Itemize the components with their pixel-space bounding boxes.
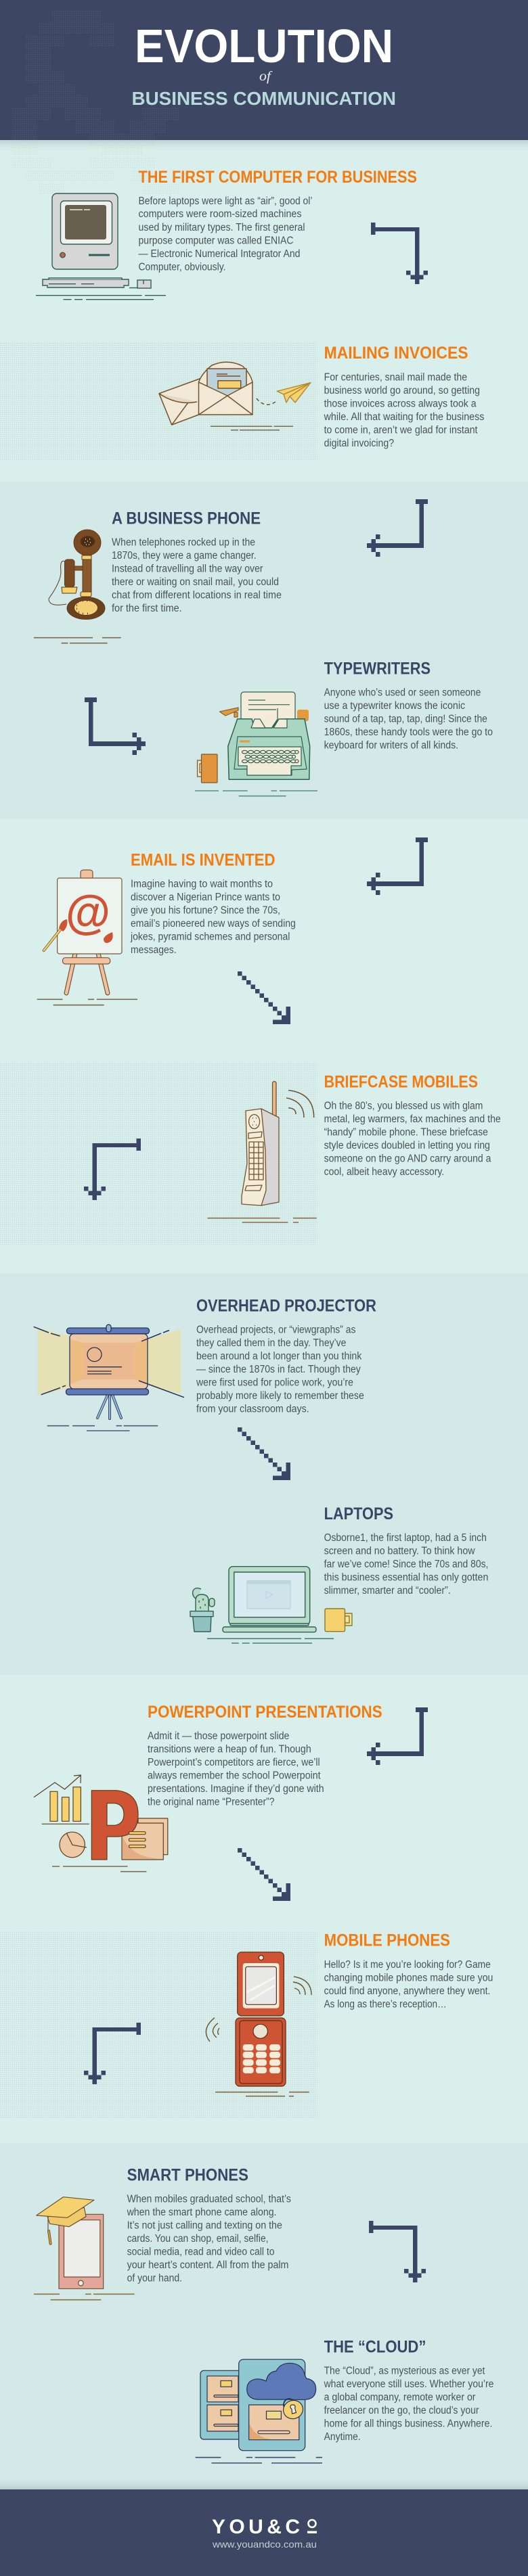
body text: Admit it — those powerpoint slide xyxy=(148,1730,289,1742)
body text: As long as there’s reception… xyxy=(324,1998,447,2010)
arrow xyxy=(84,2023,141,2084)
body text: Anytime. xyxy=(324,2431,361,2443)
body text: far we’ve come! Since the 70s and 80s, xyxy=(324,1559,488,1570)
body text: of your hand. xyxy=(127,2272,182,2284)
body text: were first used for police work, you’re xyxy=(196,1377,353,1388)
panel: powerpoint presentations xyxy=(34,1703,428,1901)
body text: discover a Nigerian Prince wants to xyxy=(131,892,280,903)
body text: Oh the 80’s, you blessed us with glam xyxy=(324,1100,483,1111)
body text: slimmer, smarter and “cooler”. xyxy=(324,1585,451,1596)
icon: presentation P with charts xyxy=(34,1775,168,1872)
body text xyxy=(130,878,296,956)
heading: LAPTOPS xyxy=(324,1504,393,1523)
icon: typewriter and mug xyxy=(195,692,317,796)
header banner xyxy=(0,0,528,194)
body text: It’s not just calling and texting on the xyxy=(127,2220,282,2231)
body text: 1870s, they were a game changer. xyxy=(112,550,257,561)
body text: — Electronic Numerical Integrator And xyxy=(138,248,301,260)
body text: freelancer on the go, the cloud’s your xyxy=(324,2405,479,2416)
panel: the cloud xyxy=(196,2338,493,2463)
body text: messages. xyxy=(131,944,177,956)
footer xyxy=(0,2476,528,2576)
body text: this business essential has only gotten xyxy=(324,1572,488,1583)
body text: been around a lot longer than you think xyxy=(196,1350,362,1362)
body text: use a typewriter knows the iconic xyxy=(324,700,465,712)
arrow xyxy=(367,1707,428,1765)
body text: Osborne1, the first laptop, had a 5 inch xyxy=(324,1532,487,1544)
title: EVOLUTION xyxy=(135,20,393,72)
heading: THE FIRST COMPUTER FOR BUSINESS xyxy=(138,168,417,187)
body text: social media, read and video call to xyxy=(127,2246,275,2257)
body text: Hello? Is it me you’re looking for? Game xyxy=(324,1959,491,1971)
arrow xyxy=(371,223,428,284)
body text: presentations. Imagine if they’d gone with xyxy=(148,1783,324,1795)
body text: screen and no battery. To think how xyxy=(324,1545,475,1557)
body text: sound of a tap, tap, tap, ding! Since the xyxy=(324,714,487,725)
body text: used by military types. The first general xyxy=(138,222,305,233)
body text: to come in, aren’t we glad for instant xyxy=(324,425,478,436)
heading: A BUSINESS PHONE xyxy=(112,509,261,528)
diagonal arrow xyxy=(238,1427,290,1480)
icon: brick phone xyxy=(207,1082,317,1222)
panel: typewriters xyxy=(85,660,493,796)
arrow xyxy=(369,2221,426,2282)
icon: projector screen xyxy=(34,1325,184,1431)
body text: there or waiting on snail mail, you could xyxy=(112,576,279,588)
arrow xyxy=(367,837,428,895)
body text: your heart’s content. All from the palm xyxy=(127,2259,288,2271)
panel: overhead projector xyxy=(34,1296,376,1480)
body text xyxy=(324,1959,493,2010)
body text: what everyone still uses. Whether you’re xyxy=(324,2378,493,2390)
arrow xyxy=(84,1138,141,1200)
heading: BRIEFCASE MOBILES xyxy=(324,1072,478,1091)
subtitle: BUSINESS COMMUNICATION xyxy=(131,88,396,109)
body text: from your classroom days. xyxy=(196,1403,309,1414)
body text xyxy=(324,1100,501,1178)
body text: Before laptops were light as “air”, good ol’ xyxy=(138,196,313,207)
body text: The “Cloud”, as mysterious as ever yet xyxy=(324,2366,485,2377)
body text: When mobiles graduated school, that’s xyxy=(127,2193,291,2205)
body text: metal, leg warmers, fax machines and the xyxy=(324,1113,501,1125)
heading: THE “CLOUD” xyxy=(324,2338,426,2357)
icon: envelopes and paper plane xyxy=(159,362,311,430)
body text: digital invoicing? xyxy=(324,438,394,449)
body text xyxy=(324,372,485,449)
heading: MOBILE PHONES xyxy=(324,1931,450,1950)
panel: email is invented xyxy=(37,837,428,1024)
body text: when the smart phone came along. xyxy=(127,2207,276,2218)
body text xyxy=(138,196,313,273)
icon: cloud with tablets xyxy=(196,2360,322,2463)
icon: easel with at sign: @ xyxy=(66,886,110,938)
body text: could find anyone, anywhere they went. xyxy=(324,1985,490,1997)
body text: purpose computer was called ENIAC xyxy=(138,235,294,246)
body text: 1860s, these handy tools were the go to xyxy=(324,727,493,738)
body text: they called them in the day. They’ve xyxy=(196,1337,346,1349)
logo: YOU&C xyxy=(212,2516,300,2538)
body text: business world go around, so getting xyxy=(324,385,480,396)
body text xyxy=(324,2366,493,2443)
heading: POWERPOINT PRESENTATIONS xyxy=(148,1703,382,1722)
body text: probably more likely to remember these xyxy=(196,1390,364,1402)
body text: while. All that waiting for the business xyxy=(324,411,485,423)
body text: give you his fortune? Since the 70s, xyxy=(131,904,280,916)
icon: easel with at sign xyxy=(37,870,137,1005)
body text: a global company, remote worker or xyxy=(324,2392,475,2404)
body text: computers were room-sized machines xyxy=(138,208,302,220)
arrow xyxy=(367,499,428,557)
heading: TYPEWRITERS xyxy=(324,660,431,678)
diagonal arrow xyxy=(238,1848,290,1901)
body text: jokes, pyramid schemes and personal xyxy=(130,931,290,942)
body text: transitions were a heap of fun. Though xyxy=(148,1744,311,1755)
panel: the first computer xyxy=(36,168,428,300)
body text: keyboard for writers of all kinds. xyxy=(324,740,458,752)
body text: Anyone who’s used or seen someone xyxy=(324,687,481,699)
heading: SMART PHONES xyxy=(127,2165,248,2184)
body text: For centuries, snail mail made the xyxy=(324,372,467,383)
panel: a business phone xyxy=(34,499,428,643)
body text: Computer, obviously. xyxy=(138,261,226,273)
body text xyxy=(112,537,282,614)
icon: desktop computer xyxy=(36,193,166,300)
panel: briefcase mobiles xyxy=(0,1062,501,1245)
body text: someone on the go AND carry around a xyxy=(324,1153,491,1164)
body text: Imagine having to wait months to xyxy=(131,878,273,890)
website address: www.youandco.com.au xyxy=(212,2539,317,2550)
body text xyxy=(324,1532,488,1596)
body text xyxy=(324,687,493,752)
body text: always remember the school Powerpoint xyxy=(148,1770,321,1782)
icon: laptop, cactus and mug xyxy=(190,1567,352,1643)
panel: mailing invoices xyxy=(0,342,485,460)
body text: — since the 1870s in fact. Though they xyxy=(196,1364,361,1375)
body text: home for all things business. Anywhere. xyxy=(324,2418,492,2430)
panel: laptops xyxy=(190,1504,488,1643)
title connector: of xyxy=(259,69,273,84)
icon: candlestick telephone xyxy=(34,530,121,643)
body text: When telephones rocked up in the xyxy=(112,537,255,548)
body text xyxy=(148,1730,324,1808)
body text xyxy=(196,1324,364,1414)
icon: flip phone xyxy=(206,1952,311,2096)
body text xyxy=(127,2193,291,2284)
body text: “handy” mobile phone. These briefcase xyxy=(324,1126,488,1138)
heading: OVERHEAD PROJECTOR xyxy=(196,1296,376,1315)
heading: MAILING INVOICES xyxy=(324,344,468,363)
body text: those invoices across always took a xyxy=(324,398,477,410)
body text: chat from different locations in real time xyxy=(112,590,282,601)
icon: smartphone with graduation cap xyxy=(34,2197,134,2300)
world map dots xyxy=(12,10,179,194)
body text: cards. You can shop, email, selfie, xyxy=(127,2233,268,2245)
body text: Powerpoint’s competitors are fierce, we’ll xyxy=(148,1757,320,1768)
body text: email’s pioneered new ways of sending xyxy=(131,918,296,929)
arrow xyxy=(85,697,146,755)
diagonal arrow xyxy=(238,971,290,1024)
body text: Overhead projects, or “viewgraphs” as xyxy=(196,1324,356,1335)
panel: smart phones xyxy=(34,2165,426,2300)
body text: cool, albeit heavy accessory. xyxy=(324,1166,444,1178)
panel: mobile phones xyxy=(0,1931,493,2119)
body text: for the first time. xyxy=(112,603,182,614)
body text: the original name “Presenter”? xyxy=(148,1797,275,1808)
body text: changing mobile phones made sure you xyxy=(324,1973,493,1983)
body text: Instead of travelling all the way over xyxy=(112,563,263,575)
heading: EMAIL IS INVENTED xyxy=(131,850,275,869)
body text: style devices doubled in letting you ring xyxy=(324,1140,490,1151)
